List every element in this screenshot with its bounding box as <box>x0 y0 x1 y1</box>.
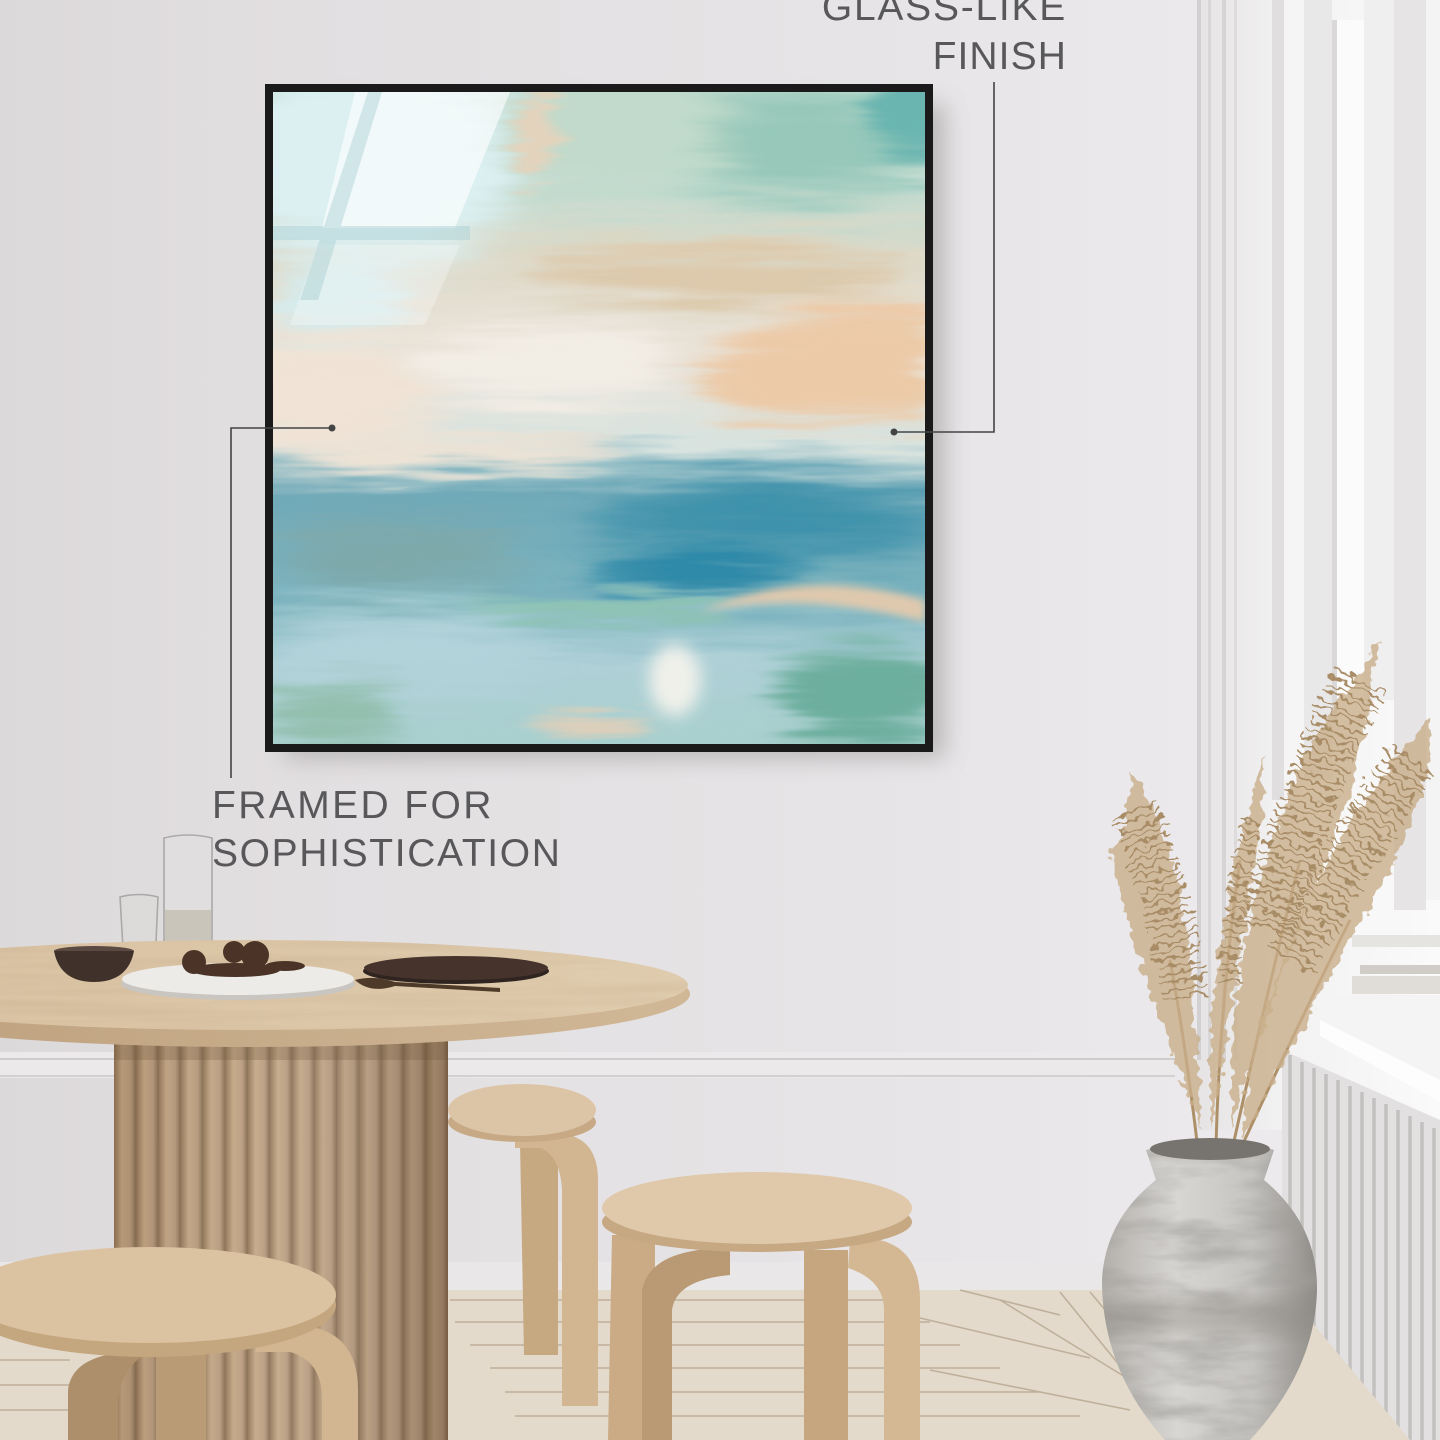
callout: framed for sophistication: SOPHISTICATION <box>212 832 562 875</box>
marble board <box>121 968 355 1000</box>
back stool <box>448 1084 598 1406</box>
front right stool <box>602 1172 920 1440</box>
window reflection <box>273 92 510 325</box>
wooden floor <box>0 1290 1410 1440</box>
fluted table base <box>114 1030 448 1440</box>
wainscot rail and skirting <box>0 1052 1175 1290</box>
dark plate <box>363 958 549 984</box>
pampas grass <box>1110 640 1429 1150</box>
callout text: FRAMED FOR <box>212 784 494 827</box>
painting shadow <box>285 104 945 758</box>
vase <box>1095 1130 1325 1440</box>
framed painting <box>265 84 956 769</box>
stems <box>1170 860 1350 1150</box>
frame <box>265 84 933 752</box>
table items <box>54 941 549 1000</box>
leader line <box>231 428 332 778</box>
callout: glass-like finish: FINISH <box>933 35 1067 78</box>
radiator <box>1282 1050 1440 1440</box>
window frame and light <box>1197 0 1440 1130</box>
callout: framed for sophistication <box>212 424 562 875</box>
books on sill <box>1352 935 1440 994</box>
spoon <box>355 978 500 992</box>
canvas <box>273 92 925 744</box>
callout: glass-like finish <box>822 0 1067 436</box>
round table top <box>0 930 700 1047</box>
front left stool <box>0 1247 358 1440</box>
leader line <box>894 82 994 432</box>
glassware <box>120 835 212 965</box>
nuts <box>182 941 305 977</box>
plumes <box>1110 640 1429 1140</box>
bowl <box>54 946 134 956</box>
